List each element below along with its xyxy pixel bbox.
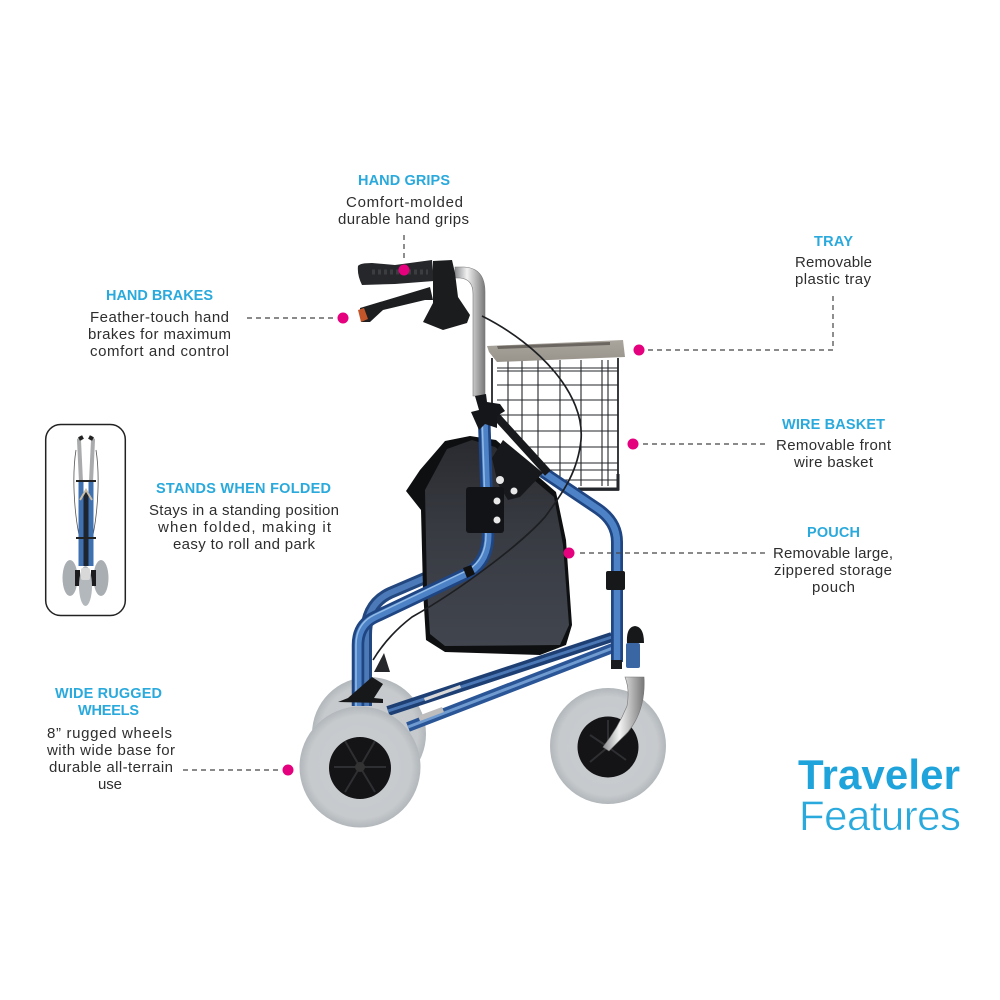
rear brake mechanism (338, 653, 390, 703)
description: comfort and control (90, 343, 229, 360)
wire basket (492, 358, 618, 490)
description (773, 545, 893, 596)
panel: folded walker thumbnail (46, 424, 125, 616)
chrome handle post (455, 267, 485, 396)
description: Comfort-molded (346, 194, 463, 211)
heading: TRAY (814, 234, 853, 250)
folding clip on rear tube (463, 565, 475, 578)
chrome front fork (603, 677, 644, 751)
description: durable hand grips (338, 211, 469, 228)
callout: wide rugged wheels (46, 686, 294, 793)
rear frame tube, far side (366, 575, 432, 706)
frame label stickers (418, 685, 461, 721)
lower frame tubes (388, 637, 618, 727)
description (338, 194, 469, 228)
heading (55, 686, 162, 719)
heading: WIRE BASKET (782, 417, 885, 433)
marker dot (634, 344, 644, 356)
hand grip (358, 260, 434, 285)
title (798, 751, 961, 839)
leader line (648, 296, 833, 350)
walker product illustration (300, 260, 666, 828)
description: Removable (795, 254, 872, 271)
description (795, 254, 872, 288)
title: Features (799, 792, 961, 839)
marker dot (338, 312, 348, 324)
rear wheel, far side (312, 677, 426, 791)
description: with wide base for (46, 742, 175, 759)
folding star knob (471, 394, 505, 430)
rear wheel, near side (300, 706, 420, 828)
heading: HAND BRAKES (106, 288, 213, 304)
folded walker wheels (62, 560, 108, 606)
leader line (643, 443, 765, 445)
description: durable all-terrain (49, 759, 173, 776)
description: 8” rugged wheels (47, 725, 172, 742)
marker dot (398, 264, 410, 276)
description: wire basket (793, 454, 874, 471)
title: Traveler (798, 751, 960, 798)
description (149, 502, 339, 553)
brake block (423, 260, 470, 330)
description (776, 437, 892, 471)
description: pouch (812, 579, 855, 596)
description: brakes for maximum (88, 326, 231, 343)
description: Removable front (776, 437, 892, 454)
heading: HAND GRIPS (358, 173, 450, 189)
leader line (403, 235, 405, 262)
leader line (247, 317, 333, 319)
callout: pouch (564, 525, 893, 596)
marker dot (282, 764, 294, 776)
heading: POUCH (807, 525, 860, 541)
description: when folded, making it (157, 519, 332, 536)
description: Stays in a standing position (149, 502, 339, 519)
pouch (406, 436, 572, 655)
rear frame tube, near side (356, 415, 488, 706)
frame clamp (606, 571, 625, 590)
removable plastic tray (487, 340, 625, 362)
front wheel (550, 688, 666, 804)
description (88, 309, 231, 360)
heading: WHEELS (78, 703, 139, 719)
callout: stands when folded (149, 481, 339, 553)
folded walker icon (74, 437, 98, 566)
thumbnail frame (46, 424, 125, 616)
brake cable (373, 316, 581, 660)
description: Removable large, (773, 545, 893, 562)
description: plastic tray (795, 271, 872, 288)
front head tube and cap (611, 626, 644, 669)
description (46, 725, 175, 793)
description: easy to roll and park (173, 536, 316, 553)
marker dot (628, 438, 638, 450)
leader line (579, 552, 765, 554)
heading: WIDE RUGGED (55, 686, 162, 702)
description: use (98, 776, 122, 793)
hand brake lever (358, 287, 433, 322)
leader line (183, 769, 278, 771)
callout: hand grips (338, 173, 469, 276)
callout: wire basket (628, 417, 892, 471)
description: Feather-touch hand (90, 309, 229, 326)
callout: tray (634, 234, 872, 356)
black mounting holster (466, 440, 543, 533)
description: zippered storage (774, 562, 892, 579)
callout: hand brakes (88, 288, 348, 360)
heading: STANDS WHEN FOLDED (156, 481, 331, 497)
marker dot (564, 548, 574, 558)
front frame tube (496, 416, 617, 662)
